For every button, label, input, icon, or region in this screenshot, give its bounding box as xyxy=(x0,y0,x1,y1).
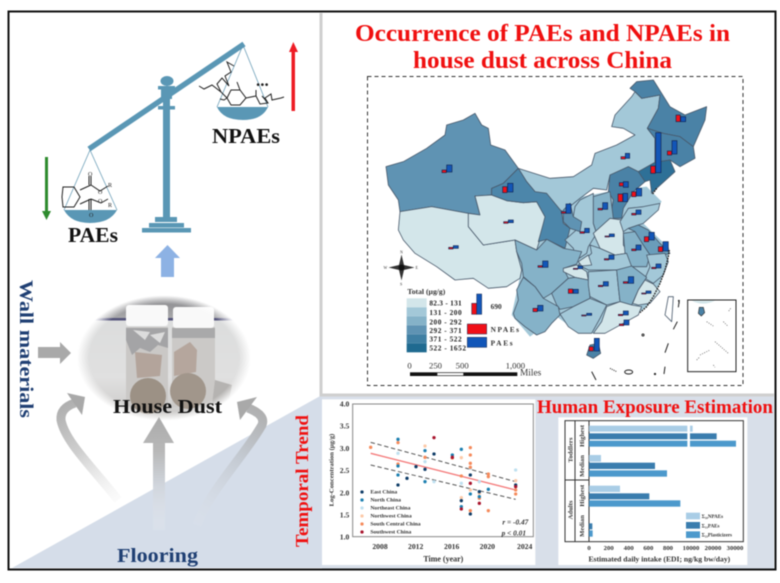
panel: temporal trend chart: Time (year) xyxy=(423,555,464,564)
group labels xyxy=(567,424,586,537)
panel dividers xyxy=(321,13,774,395)
arrow: center flooring xyxy=(143,417,174,530)
icon: PAE molecule: O xyxy=(88,172,93,178)
icon: PAE molecule: R xyxy=(108,203,112,209)
legend: total concentration: 371 - 522 xyxy=(429,335,462,344)
group labels: Highest xyxy=(579,484,586,507)
x axis labels: 600 xyxy=(643,545,654,552)
x axis labels xyxy=(587,545,744,552)
y axis labels: 1.0 xyxy=(340,532,349,541)
x axis labels: 30000 xyxy=(727,545,744,552)
icon: PAE molecule: O xyxy=(89,213,94,219)
group labels: Median xyxy=(579,515,586,537)
text: more compounds ellipsis: ... xyxy=(256,71,269,90)
arrow: wall to dust xyxy=(38,342,71,364)
statistics: p < 0.01 xyxy=(501,528,526,537)
x axis labels: 2020 xyxy=(480,542,495,551)
chart legend: North China xyxy=(370,498,401,504)
map: China provinces xyxy=(386,80,707,380)
scale bar: 500 xyxy=(456,360,469,370)
chart legend: Northeast China xyxy=(370,506,411,512)
legend: Σ₁₃PAEs xyxy=(702,524,720,529)
panel: human exposure chart: Estimated daily intake (EDI; ng/kg bw/day) xyxy=(588,555,731,563)
inset: south china sea xyxy=(688,300,736,372)
legend: total concentration: 131 - 200 xyxy=(429,308,462,317)
icon: compass: S xyxy=(400,282,402,286)
y axis labels xyxy=(340,400,349,541)
panel: bottom right background xyxy=(322,395,774,569)
x axis labels: 2016 xyxy=(444,542,459,551)
left pan xyxy=(64,210,117,223)
x axis labels: 800 xyxy=(663,545,674,552)
arrow: left flooring xyxy=(61,393,118,500)
scale bar: 250 xyxy=(429,360,442,370)
x axis labels: 20000 xyxy=(705,545,722,552)
y axis labels: 1.5 xyxy=(340,510,349,519)
panel: temporal trend chart: Log-Concentration (µg/g) xyxy=(328,434,335,506)
statistics: r = -0.47 xyxy=(502,517,529,526)
icon: compass xyxy=(384,250,418,286)
x axis labels: 0 xyxy=(587,545,591,552)
chart legend: Southwest China xyxy=(370,530,412,536)
legend: bar key: 690 xyxy=(491,302,502,311)
statistics xyxy=(501,517,529,537)
title: Occurrence of PAEs and NPAEs in xyxy=(355,21,730,47)
y axis labels: 2.0 xyxy=(340,488,349,497)
x axis labels: 2012 xyxy=(408,542,423,551)
label: Wall materials: Wall materials xyxy=(15,280,36,418)
scatter points xyxy=(396,452,517,485)
heading: Temporal Trend: Temporal Trend xyxy=(292,415,312,547)
east coast line xyxy=(640,188,669,313)
legend: Σ₂₃Plasticizers xyxy=(702,534,732,539)
scale pan strings xyxy=(64,45,268,210)
map bars xyxy=(442,115,686,351)
legend: total concentration: 292 - 371 xyxy=(429,326,462,335)
bars: adults highest xyxy=(589,486,680,507)
title: house dust across China xyxy=(413,48,672,74)
legend: bar key xyxy=(467,294,519,347)
regression lines xyxy=(371,453,516,490)
scale bar: 1,000 xyxy=(506,360,525,370)
arrow: red up xyxy=(289,42,298,111)
panel: balance scale xyxy=(64,44,268,232)
heading: Human Exposure Estimation: Human Exposure Estimation xyxy=(537,398,774,418)
legend: total concentration: 82.3 - 131 xyxy=(429,298,462,307)
label: NPAEs: NPAEs xyxy=(212,124,280,148)
x axis labels xyxy=(372,542,532,551)
icon: NPAE molecule xyxy=(199,62,284,105)
icon: PAE molecule: R xyxy=(108,183,112,189)
provinces xyxy=(386,80,707,358)
scale post xyxy=(142,76,191,232)
panel: temporal trend chart xyxy=(322,399,535,565)
label: PAEs: PAEs xyxy=(68,223,118,247)
chart legend xyxy=(360,490,421,536)
x axis labels: 2008 xyxy=(372,542,388,551)
legend: total concentration: Total (µg/g) xyxy=(407,287,446,296)
title xyxy=(355,21,730,74)
panel: human exposure chart xyxy=(558,417,747,565)
group labels: Median xyxy=(579,455,586,477)
label: Flooring: Flooring xyxy=(117,546,198,567)
icon: PAE molecule: O xyxy=(98,199,103,205)
x axis labels: 10000 xyxy=(683,545,700,552)
x axis labels: 200 xyxy=(604,545,614,552)
bars: toddlers highest xyxy=(589,426,736,447)
south and central provinces xyxy=(513,192,670,358)
scale beam xyxy=(89,44,244,149)
arrow: blue up xyxy=(155,245,180,277)
y axis labels: 3.5 xyxy=(340,422,349,431)
legend: bar key: PAEs xyxy=(491,338,513,347)
chart legend: East China xyxy=(370,490,397,496)
coastal island marks xyxy=(592,300,679,380)
right pan xyxy=(217,107,268,120)
scale bar: Miles xyxy=(520,369,542,379)
legend xyxy=(686,513,732,539)
y axis labels: 2.5 xyxy=(340,466,349,475)
legend: total concentration xyxy=(407,287,466,353)
group labels: Adults xyxy=(567,500,574,519)
icon: PAE molecule xyxy=(62,172,112,219)
icon: compass: N xyxy=(400,250,403,254)
y axis labels: 3.0 xyxy=(340,444,349,453)
bars: adults median xyxy=(589,523,593,537)
x axis labels: 400 xyxy=(624,545,634,552)
legend: bar key: NPAEs xyxy=(491,325,519,334)
photo: house dust vials xyxy=(80,296,248,420)
legend: total concentration: 200 - 292 xyxy=(429,317,462,326)
label: House Dust: House Dust xyxy=(113,397,223,418)
chart legend: South Central China xyxy=(370,522,421,528)
icon: compass: E xyxy=(416,265,418,270)
y axis labels: 4.0 xyxy=(340,400,349,409)
arrow: right flooring xyxy=(197,397,263,525)
x axis labels: 2024 xyxy=(517,542,532,551)
chart legend: Northwest China xyxy=(370,514,412,520)
panel: flooring triangle xyxy=(12,395,322,568)
arrow: green down xyxy=(42,157,51,220)
group labels: Highest xyxy=(579,424,586,447)
bars: toddlers median xyxy=(589,455,667,477)
plot frame xyxy=(353,404,533,537)
panel: map frame xyxy=(368,76,743,386)
scale bar: 0 xyxy=(407,360,412,370)
icon: PAE molecule: O xyxy=(98,190,103,196)
legend: total concentration: 522 - 1652 xyxy=(429,344,466,353)
scale bar xyxy=(407,360,542,379)
plot frame xyxy=(565,421,743,542)
group labels: Toddlers xyxy=(567,437,574,462)
icon: compass: W xyxy=(384,265,388,270)
legend: Σ₁₀NPAEs xyxy=(702,515,723,520)
